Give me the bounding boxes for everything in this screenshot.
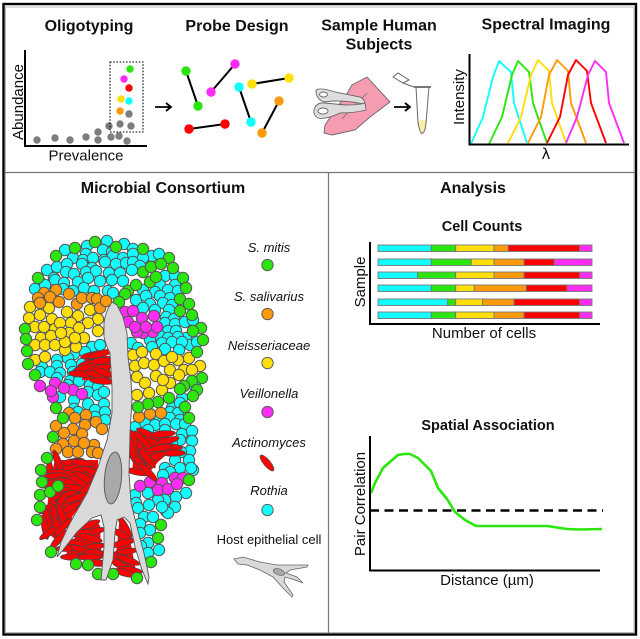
heading: Analysis: Analysis: [440, 180, 506, 197]
icon: forceps: [314, 89, 366, 118]
cell counts axes: [370, 242, 600, 324]
heading: Microbial Consortium: Microbial Consortium: [81, 180, 245, 197]
legend: Actinomyces: Actinomyces: [231, 435, 306, 450]
spectral axes: [470, 54, 629, 144]
y axis label: Abundance: [10, 64, 27, 140]
panel: sample human subjects: [314, 18, 437, 135]
legend: Host epithelial cell: [217, 532, 321, 597]
Rothia cells: [29, 235, 203, 559]
grey scatter points: [33, 110, 135, 145]
icon: tissue sample: [324, 77, 390, 135]
heading: Spatial Association: Spatial Association: [421, 418, 555, 434]
legend: S. salivarius: [234, 289, 305, 320]
arrow: oligotyping to probe design: [155, 103, 171, 111]
y axis label: Sample: Sample: [352, 257, 369, 307]
panel: spectral imaging: [451, 16, 629, 163]
x axis label: λ: [542, 145, 551, 163]
panel: sample human subjects: Subjects: [346, 36, 412, 54]
legend: Rothia: Rothia: [250, 483, 288, 498]
legend: Actinomyces: [231, 435, 306, 473]
consortium illustration: [19, 235, 209, 584]
arrow: sample to tube: [394, 103, 410, 111]
heading: Probe Design: Probe Design: [185, 18, 289, 35]
legend: Neisseriaceae: Neisseriaceae: [228, 338, 310, 353]
x axis label: Distance: Distance (µm): [440, 572, 534, 589]
legend: [217, 240, 321, 597]
heading: Spectral Imaging: Spectral Imaging: [482, 16, 610, 34]
x axis label: Number of cells: Number of cells: [432, 325, 536, 342]
heading: Oligotyping: Oligotyping: [45, 18, 133, 35]
panel: analysis: [352, 180, 603, 589]
Actinomyces cells: [38, 348, 186, 579]
pair correlation line chart: [370, 436, 603, 570]
probe pairs: [181, 59, 294, 138]
coloured scatter points: [116, 65, 134, 115]
legend: Rothia: [250, 483, 288, 516]
S. mitis cells: [19, 236, 209, 584]
icon: sample tube: [393, 73, 431, 134]
panel: oligotyping: [10, 18, 147, 164]
dashed selection box: [110, 62, 143, 132]
legend: Host epithelial cell: Host epithelial cell: [217, 532, 321, 547]
heading: Cell Counts: Cell Counts: [442, 219, 522, 235]
legend: Veillonella: Veillonella: [240, 386, 298, 401]
legend: Neisseriaceae: [228, 338, 310, 369]
stacked bar chart: [378, 245, 592, 318]
host epithelial cell: [57, 302, 149, 584]
heading: Sample Human Subjects: Sample Human: [321, 18, 437, 34]
spectral emission curves: [471, 60, 624, 144]
S. salivarius cells: [32, 284, 167, 459]
legend: S. salivarius: S. salivarius: [234, 289, 305, 304]
legend: S. mitis: [248, 240, 291, 271]
y axis label: Pair Correlation: Pair Correlation: [352, 452, 369, 556]
scatter plot axes: [25, 50, 147, 146]
y axis label: Intensity: [451, 69, 468, 125]
Veillonella cells: [34, 305, 189, 496]
Neisseriaceae cells: [23, 301, 206, 401]
legend: S. mitis: S. mitis: [248, 240, 291, 255]
legend: Veillonella: [240, 386, 298, 418]
panel: microbial consortium: [19, 180, 245, 584]
panel: probe design: [181, 18, 294, 138]
x axis label: Prevalence: [48, 148, 124, 164]
